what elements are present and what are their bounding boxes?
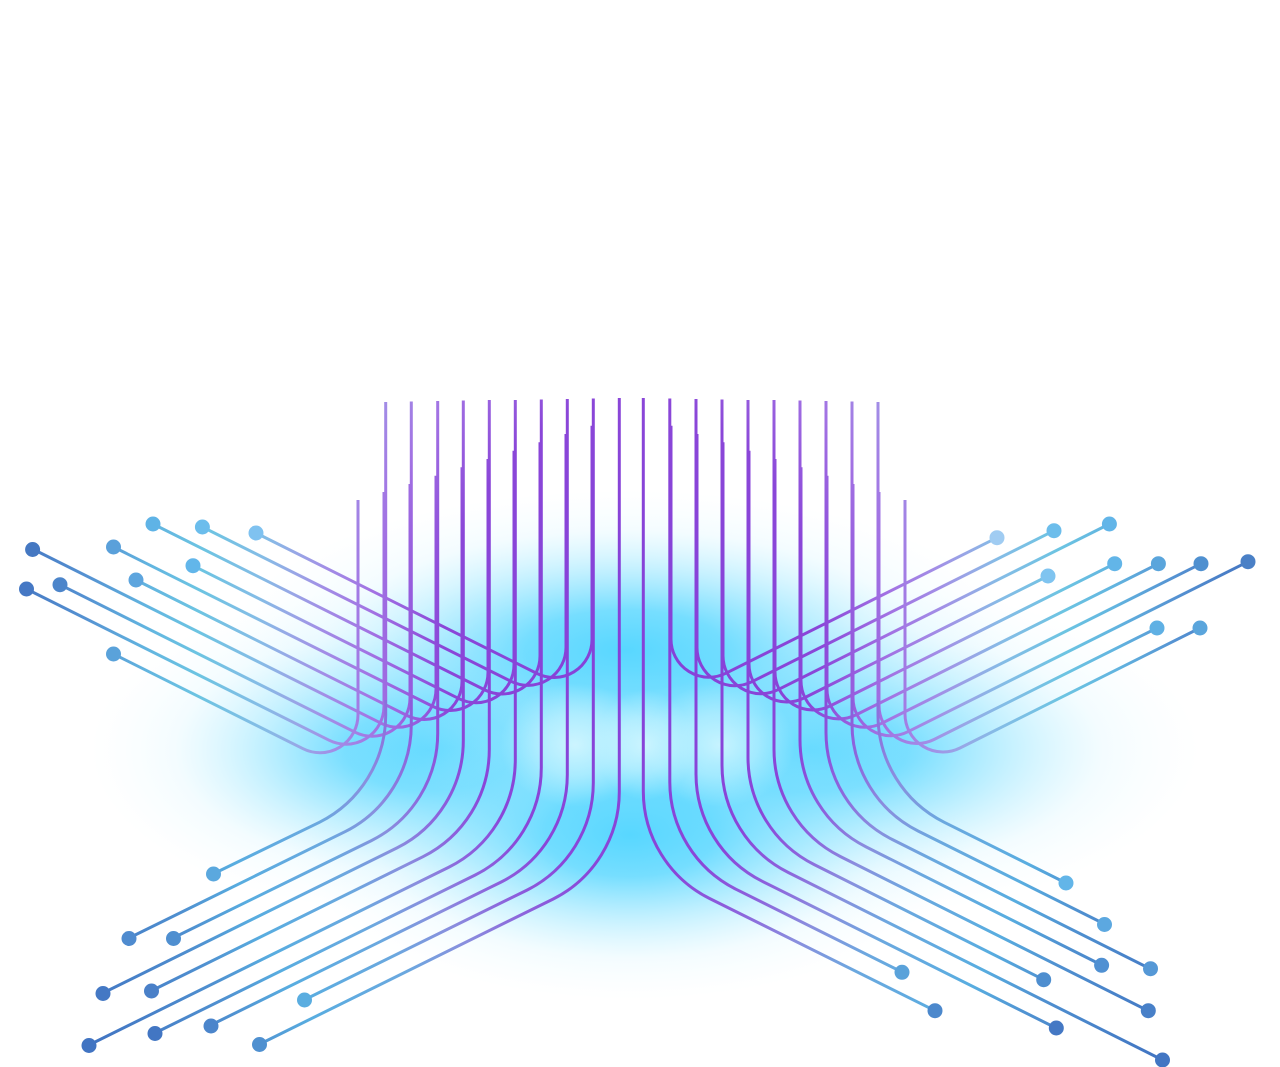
connector: lower-left 9 [129,700,411,938]
connector: upper-left 7 [33,476,436,727]
connector: upper-right 1 [671,426,997,677]
connector: upper-right 7 [827,476,1201,727]
endpoint nodes: upper-left [19,516,264,662]
connector: upper-right 4 [749,451,1048,702]
connector: upper-right 9 [879,492,1157,744]
connector: lower-left 6 [151,700,489,991]
connector: lower-right 6 [774,700,1148,1011]
connector: lower-right 9 [852,700,1104,924]
connector: upper-right 6 [801,467,1158,719]
connector: lower-right 4 [722,700,1162,1060]
connector: upper-left 3 [153,442,540,694]
connector: lower-right 8 [826,700,1150,969]
connector: upper-right 2 [697,434,1054,686]
endpoint nodes: upper-right [990,516,1256,636]
connector: upper-right 3 [723,442,1109,694]
connector: lower-left 10 [213,700,386,874]
connector: upper-left 4 [193,451,514,703]
connector: lower-left 3 [211,700,567,1025]
connector: lower-left 7 [103,700,463,993]
connector: lower-left 8 [173,700,438,938]
background: cyan glow [90,490,1200,1000]
connector: lower-left 1 [260,700,619,1044]
connector: lower-right 1 [643,700,935,1011]
upper-right connectors [671,426,1248,752]
connector: upper-right 8 [853,484,1248,736]
connector: lower-left 2 [304,700,593,1000]
vertical trunks [386,398,878,700]
connector: upper-left 6 [136,467,462,720]
connector: upper-left 8 [60,484,410,736]
connector: upper-left 2 [202,434,566,685]
connector: upper-left 9 [26,492,384,744]
connector: lower-right 10 [878,700,1066,883]
connector: lower-left 4 [155,700,541,1033]
connector: upper-left 1 [256,426,592,678]
connector: upper-left 10 [114,500,358,753]
connector: lower-left 5 [89,700,515,1045]
connector: upper-left 5 [114,459,488,711]
connector: lower-right 3 [696,700,1056,1028]
endpoint nodes: lower-left [82,866,312,1053]
upper-left connectors [26,426,592,753]
connector: upper-right 10 [905,500,1200,752]
endpoint nodes: lower-right [894,876,1170,1067]
connector: upper-right 5 [775,459,1115,710]
lower-left connectors [89,700,619,1045]
lower-right connectors [643,700,1162,1060]
connector: lower-right 7 [800,700,1102,965]
connector: lower-right 2 [670,700,902,972]
connector: lower-right 5 [748,700,1044,980]
